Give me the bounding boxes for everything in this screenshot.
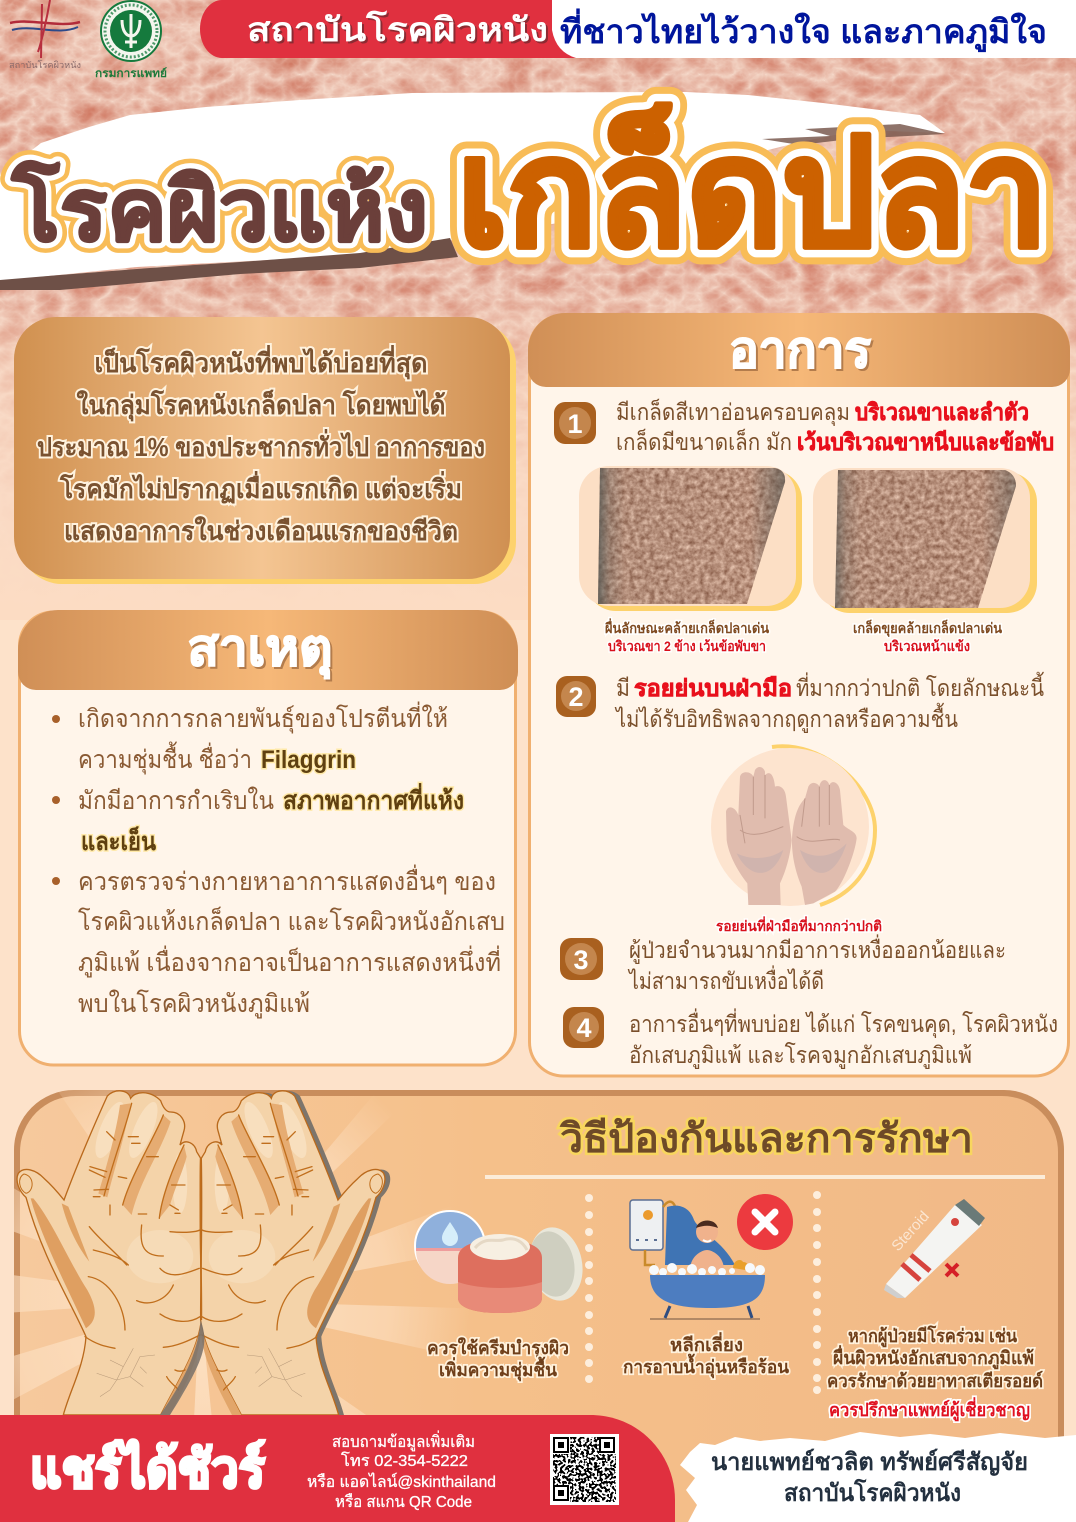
- symptom 1: มีเกล็ดสีเทาอ่อนครอบคลุม: [616, 397, 850, 426]
- contact text: สอบถามข้อมูลเพิ่มเติม: [332, 1430, 475, 1452]
- contact text: หรือ สแกน QR Code: [335, 1493, 472, 1511]
- logo: department of medical services: กรมการแพทย์: [95, 67, 167, 80]
- title: dry skin: โรคผิวแห้ง: [11, 160, 428, 259]
- torn edge shadow top right: [762, 124, 945, 145]
- symptom 1: บริเวณขาและลำตัว: [855, 399, 1029, 425]
- intro text: ในกลุ่มโรคหนังเกล็ดปลา โดยพบได้: [76, 389, 446, 422]
- prevention heading: วิธีป้องกันและการรักษา: [559, 1117, 973, 1161]
- contact text: หรือ แอดไลน์@skinthailand: [307, 1472, 496, 1491]
- causes bullets: ควรตรวจร่างกายหาอาการแสดงอื่นๆ ของ: [78, 864, 496, 896]
- QR code: [550, 1434, 619, 1505]
- badge 3: 3: [573, 945, 589, 975]
- doctor credit: สถาบันโรคผิวหนัง: [784, 1478, 961, 1507]
- causes header: [18, 610, 518, 690]
- intro text: [37, 344, 485, 546]
- photo captions: เกล็ดขุยคล้ายเกล็ดปลาเด่น: [853, 619, 1002, 637]
- intro text: โรคมักไม่ปรากฏเมื่อแรกเกิด แต่จะเริ่ม: [59, 470, 462, 504]
- symptom 1: เว้นบริเวณขาหนีบและข้อพับ: [797, 429, 1054, 455]
- badge 3: [560, 938, 603, 980]
- header slogan: ที่ชาวไทยไว้วางใจ และภาคภูมิใจ: [560, 8, 1047, 53]
- causes header: สาเหตุ: [188, 620, 332, 679]
- logo: department of medical services: [95, 1, 167, 80]
- causes bullets: เกิดจากการกลายพันธุ์ของโปรตีนที่ให้: [78, 701, 448, 734]
- header red pill: [200, 0, 590, 58]
- intro text: เป็นโรคผิวหนังที่พบได้บ่อยที่สุด: [94, 344, 428, 380]
- causes bullets: โรคผิวแห้งเกล็ดปลา และโรคผิวหนังอักเสบ: [78, 906, 505, 936]
- symptom 3: [560, 934, 1006, 994]
- causes bullets: และเย็น: [81, 826, 156, 856]
- main title: [11, 104, 1048, 277]
- doctor credit: นายแพทย์ชวลิต ทรัพย์ศรีสัญจัย: [711, 1448, 1028, 1476]
- dotted divider: [813, 1191, 821, 1394]
- logo: institute of dermatology: สถาบันโรคผิวหนัง: [9, 60, 81, 70]
- photo captions: บริเวณขา 2 ข้าง เว้นข้อพับขา: [608, 638, 766, 654]
- footer: share bar: [0, 1415, 675, 1522]
- contact text: โทร 02-354-5222: [341, 1451, 468, 1470]
- symptoms header: [528, 313, 1070, 387]
- torn white banner: [0, 92, 945, 290]
- photo captions: [605, 618, 1002, 654]
- symptom 1: เกล็ดมีขนาดเล็ก มัก: [616, 427, 792, 455]
- title: dry skin: โรคผิวแห้ง: [11, 160, 428, 259]
- causes bullets: สภาพอากาศที่แห้ง: [283, 783, 464, 815]
- steroid caption: ผื่นผิวหนังอักเสบจากภูมิแพ้: [833, 1345, 1034, 1370]
- title: dry skin: โรคผิวแห้ง: [11, 160, 428, 259]
- panel: symptoms: [528, 313, 1070, 1076]
- symptom 2: รอยย่นบนฝ่ามือ: [634, 675, 792, 701]
- panel: intro: [14, 317, 516, 584]
- sunburst behind hands: [14, 1090, 449, 1415]
- title: ichthyosis: เกล็ดปลา: [457, 104, 1048, 277]
- bath caption: หลีกเลี่ยง: [670, 1332, 743, 1355]
- causes bullets: พบในโรคผิวหนังภูมิแพ้: [78, 989, 310, 1019]
- header white bar: [552, 0, 1076, 58]
- steroid caption: ควรรักษาด้วยยาทาสเตียรอยด์: [827, 1370, 1043, 1391]
- symptom 2: ที่มากกว่าปกติ โดยลักษณะนี้: [796, 672, 1044, 701]
- icon: steroid tube: [884, 1199, 985, 1298]
- photo: legs: [579, 466, 802, 611]
- item: moisturizer: [415, 1211, 589, 1382]
- steroid caption: [827, 1325, 1043, 1422]
- photo captions: บริเวณหน้าแข้ง: [884, 638, 970, 654]
- badge 1: 1: [567, 409, 583, 439]
- badge 4: [563, 1007, 604, 1048]
- header banner: [200, 0, 1076, 58]
- symptom 2: มี: [616, 675, 630, 701]
- palm caption: รอยย่นที่ฝ่ามือที่มากกว่าปกติ: [716, 916, 882, 934]
- causes bullets: มักมีอาการกำเริบใน: [78, 786, 274, 815]
- badge 4: 4: [576, 1013, 592, 1043]
- dotted divider: [585, 1194, 593, 1383]
- symptom 2: [556, 672, 1044, 733]
- title: ichthyosis: เกล็ดปลา: [457, 104, 1048, 277]
- symptom 3: ไม่สามารถขับเหงื่อได้ดี: [627, 965, 824, 994]
- symptoms header: อาการ: [729, 322, 871, 378]
- illustration: dry cupped hands: [17, 1091, 390, 1415]
- steroid caption: หากผู้ป่วยมีโรคร่วม เช่น: [848, 1325, 1018, 1348]
- badge 1: [554, 402, 596, 444]
- causes bullets: ภูมิแพ้ เนื่องจากอาจเป็นอาการแสดงหนึ่งที่: [78, 945, 501, 978]
- icon: cream jar: [415, 1211, 589, 1313]
- symptom 1: [554, 397, 1054, 455]
- header institute name: สถาบันโรคผิวหนัง: [247, 10, 548, 48]
- badge 2: 2: [568, 682, 584, 712]
- icon: bath with water heater: [630, 1194, 793, 1319]
- intro text: แสดงอาการในช่วงเดือนแรกของชีวิต: [64, 516, 458, 546]
- causes bullets: ความชุ่มชื้น ชื่อว่า: [78, 741, 252, 775]
- moisturizer caption: [427, 1337, 569, 1382]
- contact text: [307, 1430, 496, 1511]
- moisturizer caption: ควรใช้ครีมบำรุงผิว: [427, 1337, 569, 1360]
- bath caption: [623, 1332, 790, 1379]
- photo: palms: [711, 746, 875, 906]
- photo captions: ผื่นลักษณะคล้ายเกล็ดปลาเด่น: [605, 618, 769, 636]
- share slogan: แชร์ได้ชัวร์: [30, 1439, 265, 1499]
- panel: prevention and treatment: [14, 1090, 1064, 1522]
- causes bullets: [52, 701, 505, 1019]
- symptom 4: อักเสบภูมิแพ้ และโรคจมูกอักเสบภูมิแพ้: [629, 1042, 972, 1069]
- intro text: ประมาณ 1% ของประชากรทั่วไป อาการของ: [37, 428, 485, 462]
- doctor credit: [680, 1432, 1076, 1522]
- symptom 3: ผู้ป่วยจำนวนมากมีอาการเหงื่อออกน้อยและ: [629, 934, 1006, 964]
- photo: shins: [813, 468, 1037, 613]
- title: ichthyosis: เกล็ดปลา: [457, 104, 1048, 277]
- icon: steroid tube: Steroid: [888, 1208, 933, 1255]
- moisturizer caption: เพิ่มความชุ่มชื้น: [439, 1356, 558, 1382]
- logo: institute of dermatology: [9, 0, 81, 70]
- symptom 4: [563, 1007, 1058, 1069]
- causes bullets: Filaggrin: [261, 746, 356, 774]
- item: avoid hot bath: [623, 1194, 793, 1379]
- steroid caption: ควรปรึกษาแพทย์ผู้เชี่ยวชาญ: [829, 1397, 1030, 1422]
- item: steroid: [827, 1199, 1043, 1422]
- torn edge shadow: [0, 238, 458, 290]
- symptom 2: ไม่ได้รับอิทธิพลจากฤดูกาลหรือความชื้น: [614, 703, 958, 733]
- badge 2: [556, 676, 596, 717]
- bath caption: การอาบน้ำอุ่นหรือร้อน: [623, 1353, 790, 1379]
- panel: causes: [18, 610, 518, 1065]
